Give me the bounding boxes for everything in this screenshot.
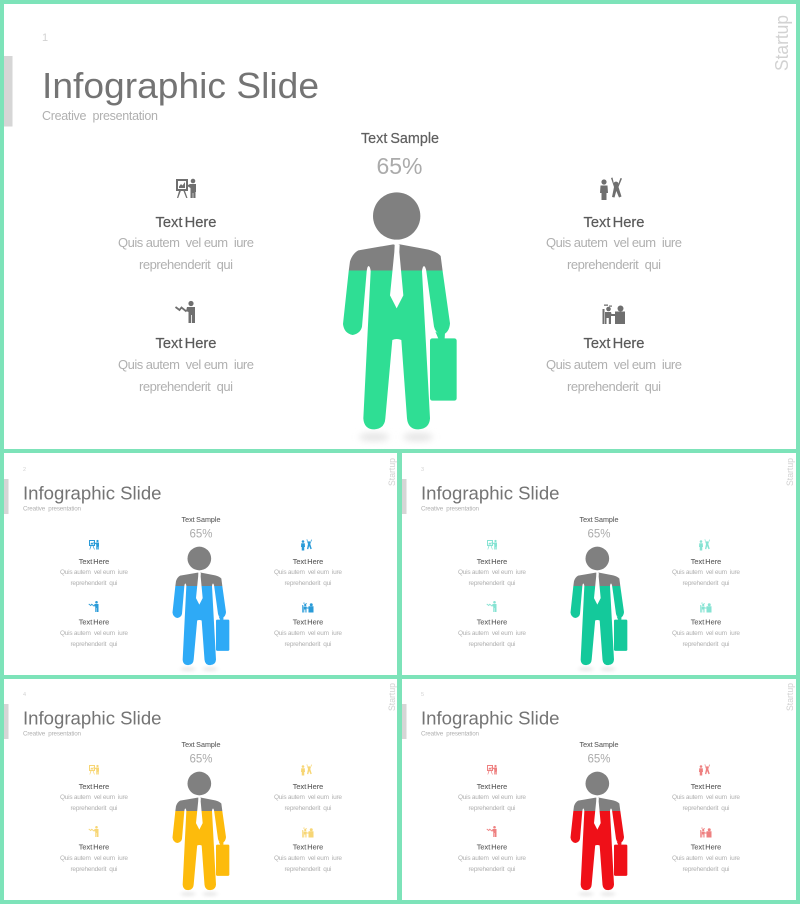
text block: top right: Text Here [691, 782, 721, 791]
icon: presenter with chart line [89, 826, 98, 837]
text block: top left: reprehenderit qui [70, 580, 118, 587]
text block: bottom right [274, 618, 342, 648]
icon: celebrating people [301, 539, 312, 550]
text block: top right: reprehenderit qui [682, 580, 730, 587]
text block: bottom left: reprehenderit qui [468, 866, 516, 873]
text block: bottom left [458, 618, 526, 648]
icon: desk meeting [700, 603, 712, 612]
subtitle: Creative presentation [23, 506, 82, 512]
panel: teal slide [402, 453, 796, 675]
businessman figure 65% filled [570, 772, 627, 890]
text block: top left: reprehenderit qui [468, 805, 516, 812]
text block: top left: reprehenderit qui [139, 257, 233, 272]
title: Infographic Slide [23, 484, 162, 504]
text block: top right: Quis autem vel eum iure [672, 794, 740, 801]
text block: top right [546, 214, 682, 272]
text block: bottom left [60, 842, 128, 873]
text block: top left: Quis autem vel eum iure [118, 235, 254, 250]
icon: celebrating people [699, 539, 710, 550]
figure shadow [180, 667, 218, 671]
text block: top left: Quis autem vel eum iure [60, 794, 128, 801]
text block: top right: Text Here [584, 214, 644, 231]
text block: bottom right: Quis autem vel eum iure [274, 630, 342, 637]
businessman figure 65% filled [172, 772, 229, 890]
text block: top right: Quis autem vel eum iure [274, 569, 342, 576]
accent bar [4, 479, 8, 514]
text block: bottom right: Quis autem vel eum iure [274, 855, 342, 862]
slide contents [23, 458, 397, 671]
icon: celebrating people [600, 178, 622, 200]
figure shadow [578, 667, 616, 671]
text block: top left: Quis autem vel eum iure [60, 569, 128, 576]
accent bar [402, 704, 406, 739]
text block: top left: Quis autem vel eum iure [458, 569, 526, 576]
accent bar [4, 56, 12, 126]
businessman figure 65% filled [343, 192, 457, 429]
slide contents [421, 458, 795, 671]
text block: top right: reprehenderit qui [284, 805, 332, 812]
title: Infographic Slide [23, 708, 162, 728]
text block: top right: reprehenderit qui [567, 257, 661, 272]
text block: top left [118, 214, 254, 272]
text block: bottom left: Quis autem vel eum iure [458, 855, 526, 862]
slide number: 2 [23, 467, 26, 473]
businessman figure 65% filled [172, 547, 229, 665]
icon: presenter with chart line [487, 826, 496, 837]
text block: top left: reprehenderit qui [468, 580, 516, 587]
icon: desk meeting [602, 304, 625, 324]
icon: presenter with chart line [89, 601, 98, 612]
text block: bottom right [672, 618, 740, 648]
text block: top left: Quis autem vel eum iure [458, 794, 526, 801]
text block: bottom right: reprehenderit qui [284, 866, 332, 873]
panel: main slide [4, 4, 796, 449]
text block: top left: Text Here [79, 782, 109, 791]
text block: top right: Text Here [691, 557, 721, 566]
vertical brand label: Startup [785, 683, 795, 711]
title: Infographic Slide [421, 484, 560, 504]
text block: bottom right: Text Here [293, 842, 323, 852]
text block: bottom left [458, 842, 526, 873]
text block: top left [458, 782, 526, 812]
text block: bottom right: reprehenderit qui [682, 866, 730, 873]
slide number: 5 [421, 692, 424, 698]
vertical brand label: Startup [772, 15, 792, 71]
text block: bottom right: Text Here [691, 842, 721, 852]
text block: top right: Text Here [293, 782, 323, 791]
text block: top right: reprehenderit qui [284, 580, 332, 587]
text block: top right: Text Here [293, 557, 323, 566]
icon: presentation [89, 765, 99, 774]
icon: presentation [89, 540, 99, 550]
figure heading: Text Sample [580, 740, 618, 749]
slide number: 3 [421, 467, 424, 473]
percentage: 65% [587, 754, 611, 766]
text block: bottom left: Quis autem vel eum iure [458, 630, 526, 637]
vertical brand label: Startup [387, 683, 397, 711]
text block: top left: Text Here [477, 782, 507, 791]
icon: celebrating people [301, 764, 312, 776]
vertical brand label: Startup [387, 458, 397, 486]
text block: bottom right: Text Here [584, 335, 644, 352]
text block: bottom left: reprehenderit qui [70, 866, 118, 873]
vertical brand label: Startup [785, 458, 795, 486]
percentage: 65% [189, 528, 213, 540]
text block: bottom right: Text Here [691, 618, 721, 626]
subtitle: Creative presentation [23, 730, 82, 738]
text block: top left: Text Here [477, 557, 507, 566]
text block: bottom right [672, 842, 740, 873]
title: Infographic Slide [421, 708, 560, 728]
slide contents [421, 683, 795, 896]
slide number: 4 [23, 692, 26, 698]
figure heading: Text Sample [580, 515, 618, 524]
text block: top right [274, 557, 342, 587]
title: Infographic Slide [42, 65, 319, 106]
icon: celebrating people [699, 764, 710, 776]
subtitle: Creative presentation [42, 109, 158, 123]
icon: desk meeting [302, 828, 314, 838]
text block: bottom left: Text Here [79, 842, 109, 852]
text block: bottom left: Text Here [156, 335, 216, 352]
text block: bottom right: Text Here [293, 618, 323, 626]
accent bar [4, 704, 8, 739]
icon: presentation [176, 179, 196, 198]
icon: desk meeting [700, 828, 712, 838]
figure shadow [180, 892, 218, 896]
icon: desk meeting [302, 603, 314, 612]
text block: top right [672, 782, 740, 812]
text block: bottom right: reprehenderit qui [567, 379, 661, 394]
text block: bottom left: Text Here [477, 842, 507, 852]
slide contents [23, 683, 397, 896]
icon: presenter with chart line [487, 601, 496, 612]
businessman figure 65% filled [570, 547, 627, 665]
icon: presentation [487, 540, 497, 550]
figure shadow [359, 433, 433, 441]
text block: top left: reprehenderit qui [70, 805, 118, 812]
text block: bottom right: Quis autem vel eum iure [546, 357, 682, 372]
text block: bottom right [274, 842, 342, 873]
panel: yellow slide [4, 679, 397, 900]
percentage: 65% [376, 153, 423, 179]
icon: presenter with chart line [176, 301, 195, 323]
figure heading: Text Sample [182, 515, 220, 524]
text block: bottom left: Quis autem vel eum iure [118, 357, 254, 372]
text block: top left [458, 557, 526, 587]
text block: top left: Text Here [79, 557, 109, 566]
figure heading: Text Sample [361, 130, 439, 147]
panel: red slide [402, 679, 796, 900]
figure heading: Text Sample [182, 740, 220, 749]
text block: top right [672, 557, 740, 587]
text block: bottom right: reprehenderit qui [284, 641, 332, 648]
text block: bottom left: Quis autem vel eum iure [60, 630, 128, 637]
text block: top right [274, 782, 342, 812]
slide number: 1 [42, 32, 48, 44]
text block: top left: Text Here [156, 214, 216, 231]
icon: presentation [487, 765, 497, 774]
accent bar [402, 479, 406, 514]
percentage: 65% [189, 754, 213, 766]
text block: top left [60, 557, 128, 587]
subtitle: Creative presentation [421, 730, 480, 738]
figure shadow [578, 892, 616, 896]
text block: top right: reprehenderit qui [682, 805, 730, 812]
text block: top left [60, 782, 128, 812]
text block: bottom left: reprehenderit qui [468, 641, 516, 648]
text block: top right: Quis autem vel eum iure [274, 794, 342, 801]
text block: bottom right: reprehenderit qui [682, 641, 730, 648]
subtitle: Creative presentation [421, 506, 480, 512]
text block: bottom left: Text Here [477, 618, 507, 626]
panel: blue slide [4, 453, 397, 675]
text block: bottom right [546, 335, 682, 394]
text block: bottom left: reprehenderit qui [70, 641, 118, 648]
text block: bottom left: Quis autem vel eum iure [60, 855, 128, 862]
text block: bottom left [60, 618, 128, 648]
text block: top right: Quis autem vel eum iure [672, 569, 740, 576]
text block: bottom right: Quis autem vel eum iure [672, 855, 740, 862]
text block: bottom left [118, 335, 254, 394]
text block: bottom left: Text Here [79, 618, 109, 626]
text block: bottom right: Quis autem vel eum iure [672, 630, 740, 637]
text block: bottom left: reprehenderit qui [139, 379, 233, 394]
percentage: 65% [587, 528, 611, 540]
text block: top right: Quis autem vel eum iure [546, 235, 682, 250]
